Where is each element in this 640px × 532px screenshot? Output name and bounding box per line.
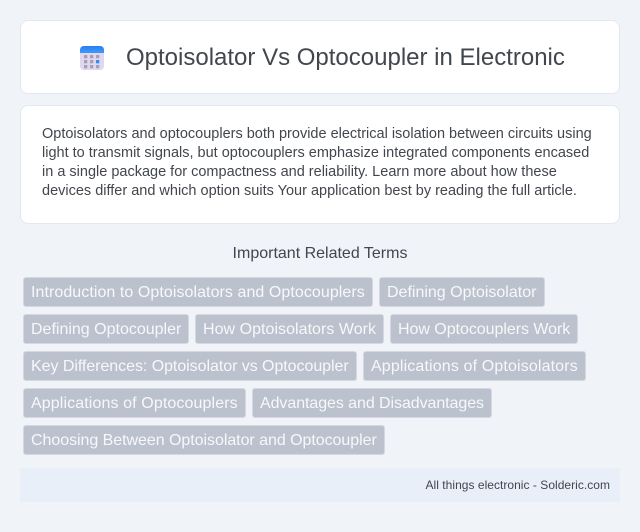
panel: term tags: Defining Optoisolator <box>387 284 536 301</box>
panel: header <box>20 20 620 94</box>
heading: important related terms: Important Related Terms <box>233 245 407 262</box>
intro text: devices differ and which option suits Your application best by reading the full article. <box>42 183 577 199</box>
panel: introduction <box>20 105 620 224</box>
panel: term tags: Applications of Optocouplers <box>31 395 238 412</box>
icon: calendar <box>80 46 104 70</box>
panel: term tags: Introduction to Optoisolators and Optocouplers <box>31 284 365 301</box>
intro text: in a single package for compactness and reliability. Learn more about how these <box>42 164 557 180</box>
panel: term tags: Defining Optocoupler <box>31 321 181 338</box>
panel: term tags: How Optoisolators Work <box>203 321 376 338</box>
panel: term tags: Applications of Optoisolators <box>371 358 578 375</box>
title: Optoisolator Vs Optocoupler in Electronic <box>126 44 565 71</box>
intro text: light to transmit signals, but optocouplers emphasize integrated components encased <box>42 145 589 161</box>
intro text <box>42 126 592 199</box>
panel: term tags: How Optocouplers Work <box>398 321 570 338</box>
intro text: Optoisolators and optocouplers both provide electrical isolation between circuits using <box>42 126 592 142</box>
footer credit: All things electronic - Solderic.com <box>426 478 610 492</box>
panel: term tags: Key Differences: Optoisolator vs Optocoupler <box>31 358 349 375</box>
footer <box>20 468 620 502</box>
panel: term tags: Choosing Between Optoisolator and Optocoupler <box>31 432 377 449</box>
panel: term tags: Advantages and Disadvantages <box>260 395 484 412</box>
